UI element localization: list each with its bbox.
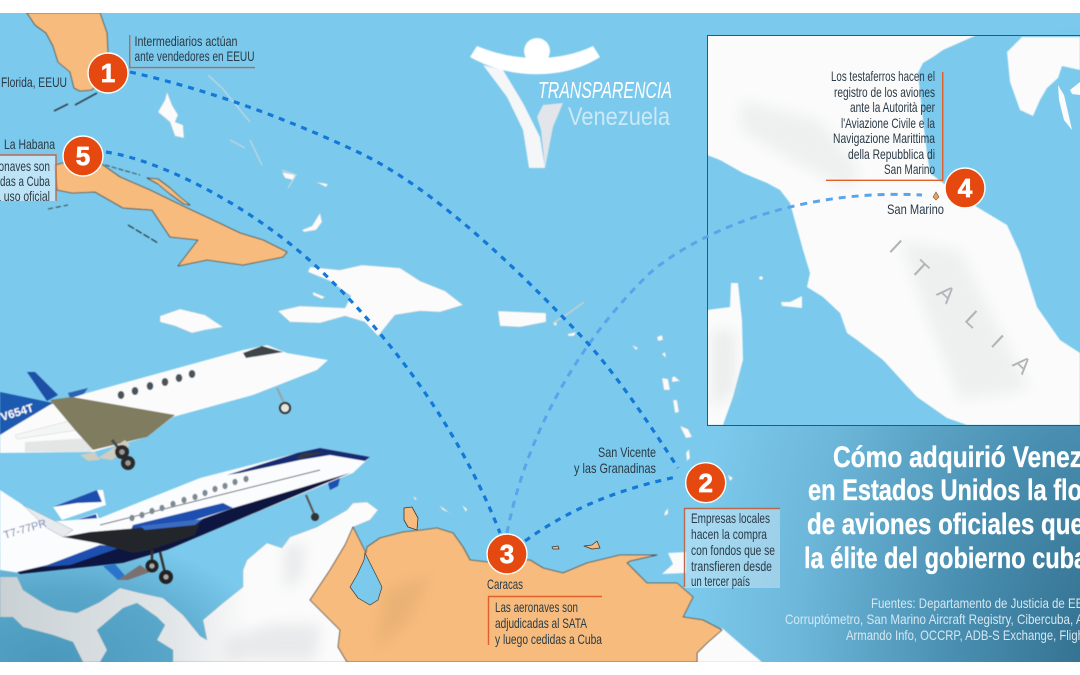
callout 2 bbox=[684, 508, 780, 589]
badge 5 bbox=[63, 136, 103, 176]
callout 4: San Marino bbox=[884, 161, 935, 177]
label: Caracas: Caracas bbox=[487, 576, 523, 592]
airplane: white and navy jet T7-77PR bbox=[0, 448, 370, 584]
title bbox=[804, 441, 1080, 575]
badge 4 bbox=[945, 168, 985, 208]
logo: Transparencia Venezuela: Venezuela bbox=[568, 103, 670, 131]
callout 4: Los testaferros hacen el bbox=[831, 68, 935, 84]
land: Cuba bbox=[55, 160, 287, 266]
airplane: white and blue jet V654T: V654T bbox=[0, 402, 35, 424]
label: Florida: Florida, EEUU bbox=[1, 74, 67, 90]
callout 4 bbox=[826, 68, 943, 180]
label: San Vicente y las Granadinas: San Vicente bbox=[598, 444, 656, 460]
callout 1: ante vendedores en EEUU bbox=[134, 48, 254, 64]
callout 3: adjudicadas al SATA bbox=[495, 615, 587, 631]
callout 5 bbox=[0, 155, 56, 204]
cays north of Cuba bbox=[147, 178, 190, 205]
callout 4: l'Aviazione Civile e la bbox=[841, 115, 935, 131]
route: Venezuela to San Marino bbox=[507, 194, 922, 533]
callout 2: Empresas locales bbox=[691, 510, 770, 526]
callout 4: della Repubblica di bbox=[848, 146, 935, 162]
label: San Vicente y las Granadinas bbox=[574, 444, 656, 476]
badge 1: 1 bbox=[101, 58, 115, 88]
land: Adriatic islands bbox=[1058, 82, 1080, 130]
lake Maracaibo bbox=[350, 553, 382, 605]
land: northern Italy and peninsula bbox=[707, 35, 1080, 425]
land: Paraguana and Margarita bbox=[376, 506, 600, 636]
land: Corsica and Elba bbox=[707, 276, 802, 425]
San Marino marker bbox=[933, 192, 939, 200]
badge 3: 3 bbox=[500, 539, 514, 569]
logo figure bbox=[470, 38, 600, 168]
sources bbox=[785, 595, 1080, 643]
callout 4: registro de los aviones bbox=[834, 84, 935, 100]
airplane: white and blue jet V654T bbox=[0, 345, 328, 470]
callout 2: un tercer país bbox=[691, 573, 750, 589]
badge 2: 2 bbox=[698, 468, 713, 498]
callout 1: Intermediarios actúan bbox=[134, 33, 238, 49]
badge 5: 5 bbox=[76, 141, 90, 171]
airplane: white and navy jet T7-77PR: T7-77PR bbox=[2, 518, 48, 542]
callout 4: Navigazione Marittima bbox=[833, 130, 935, 146]
route: La Habana to Caracas bbox=[106, 152, 500, 533]
callout 1 bbox=[130, 33, 255, 68]
callout 3: y luego cedidas a Cuba bbox=[495, 631, 602, 647]
callout 4: ante la Autorità per bbox=[850, 99, 935, 115]
logo wordmark: TRANSPARENCIA bbox=[538, 77, 672, 103]
callout 2: transfieren desde bbox=[691, 558, 772, 574]
badge 4: 4 bbox=[958, 173, 973, 203]
land: Bahamas and Caribbean islands bbox=[48, 75, 733, 516]
land: Venezuela bbox=[310, 527, 722, 662]
route: Florida to San Vicente bbox=[130, 72, 678, 468]
callout 2: con fondos que se bbox=[691, 542, 775, 558]
badge 1 bbox=[88, 53, 128, 93]
land: Central America and Colombia bbox=[0, 502, 378, 662]
label: La Habana: La Habana bbox=[4, 136, 55, 152]
label: San Marino: San Marino bbox=[887, 201, 944, 217]
callout 3 bbox=[488, 596, 602, 647]
callout 3: Las aeronaves son bbox=[495, 599, 578, 615]
route: San Vicente to Caracas bbox=[525, 477, 676, 541]
callout 2: hacen la compra bbox=[691, 526, 767, 542]
land: Trinidad bbox=[662, 552, 686, 574]
logo: Transparencia Venezuela bbox=[470, 38, 672, 168]
land: Brazil and Guyana bbox=[697, 628, 762, 662]
inset map: Italy bbox=[707, 35, 1080, 426]
label: San Vicente y las Granadinas: y las Granadinas bbox=[574, 460, 656, 476]
badge 2 bbox=[686, 463, 726, 503]
badge 3 bbox=[487, 534, 527, 574]
inset map border bbox=[708, 36, 1080, 426]
land: Croatia bbox=[1007, 37, 1080, 116]
land: Florida bbox=[27, 13, 108, 91]
label: ITALIA: ITALIA bbox=[885, 235, 1037, 380]
